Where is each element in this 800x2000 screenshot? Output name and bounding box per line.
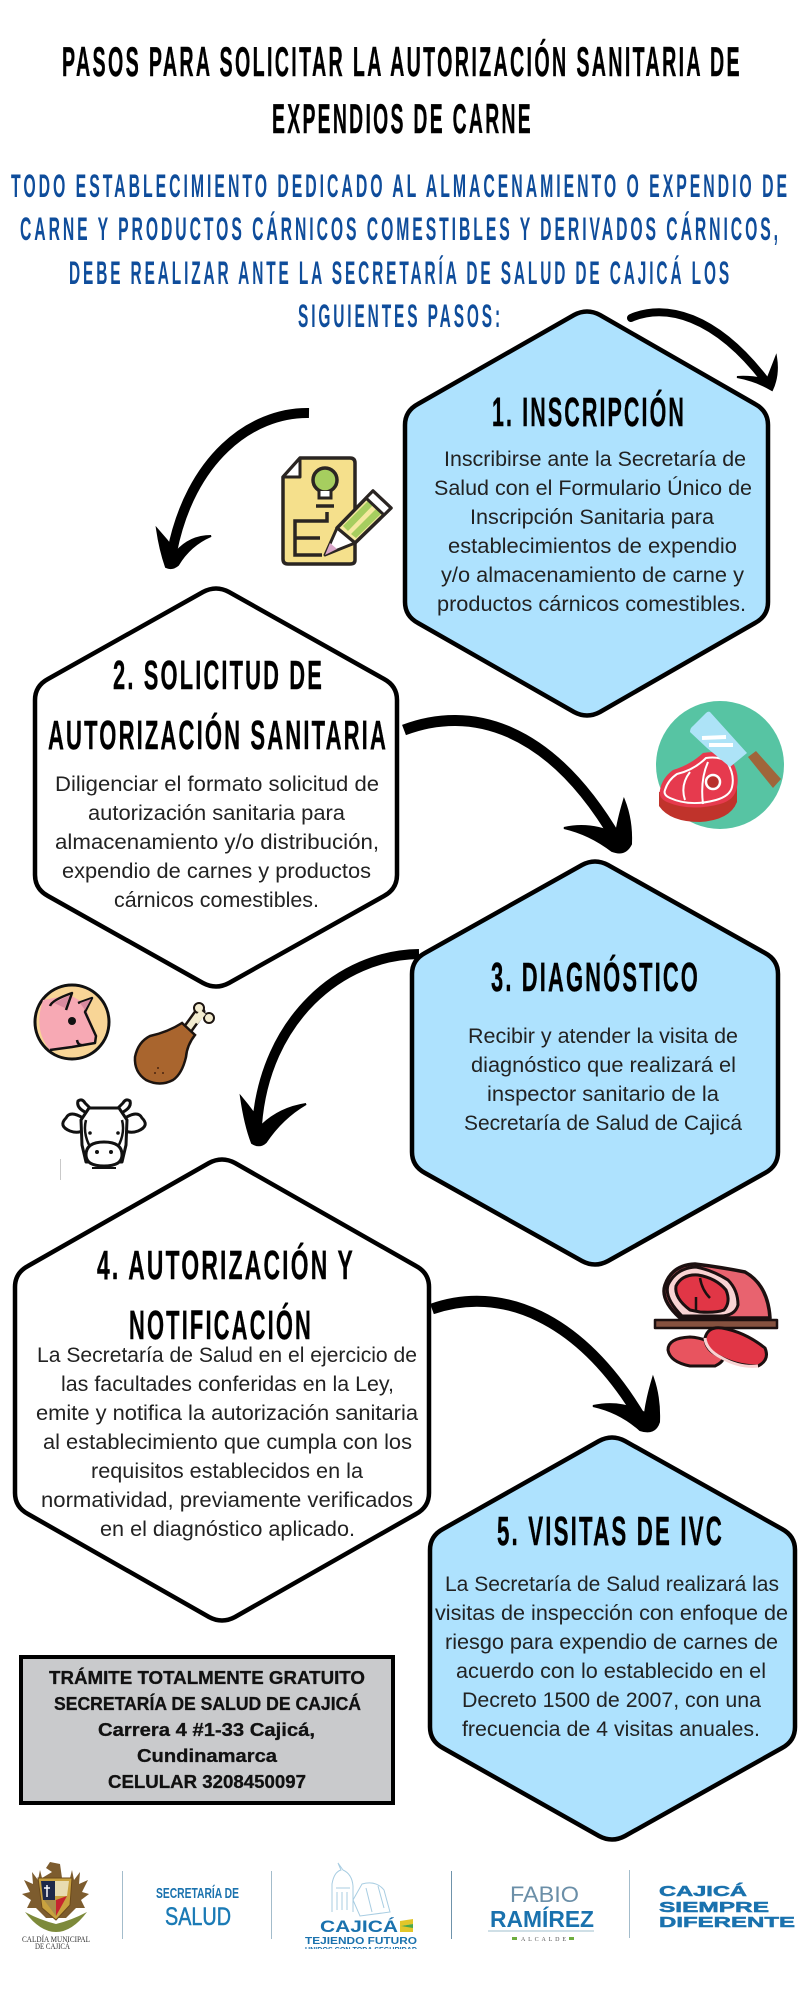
logo: Fabio Ramírez alcalde: FABIO <box>510 1882 579 1907</box>
logo: secretaría de salud <box>156 1885 239 1931</box>
title <box>62 37 742 142</box>
icon: pig <box>35 985 109 1059</box>
logo: Cajicá siempre diferente <box>659 1883 795 1931</box>
logo: secretaría de salud: SALUD <box>165 1903 231 1931</box>
panel: step 2 solicitud: AUTORIZACIÓN SANITARIA <box>48 712 388 758</box>
logo: Cajicá tejiendo futuro: TEJIENDO FUTURO <box>305 1935 417 1947</box>
panel: step 1 inscripción: y/o almacenamiento de carne y <box>441 564 745 587</box>
icon: cleaver and steak <box>656 701 784 829</box>
intro text <box>11 168 790 334</box>
logo: Cajicá tejiendo futuro: UNIDOS CON TODA SEGURIDAD <box>305 1947 417 1954</box>
panel: step 5 visitas de IVC <box>430 1438 795 1840</box>
intro text: SIGUIENTES PASOS: <box>298 298 503 334</box>
panel: step 5 visitas de IVC: riesgo para expendio de carnes de <box>445 1631 778 1654</box>
arrow: step 1 to step 2 <box>157 413 309 568</box>
icon: chicken drumstick <box>135 1003 214 1084</box>
panel: step 4 autorización y notificación: normatividad, previamente verificados <box>41 1489 413 1512</box>
panel: step 4 autorización y notificación: al establecimiento que cumpla con los <box>43 1431 412 1454</box>
panel: step 2 solicitud: Diligenciar el formato solicitud de <box>55 773 379 796</box>
panel: step 5 visitas de IVC: La Secretaría de Salud realizará las <box>445 1573 779 1596</box>
panel: step 2 solicitud: autorización sanitaria para <box>88 802 345 825</box>
panel: step 2 solicitud: almacenamiento y/o distribución, <box>55 831 379 854</box>
icon: cow <box>63 1100 145 1168</box>
logo: Cajicá tejiendo futuro <box>305 1863 417 1954</box>
panel: step 4 autorización y notificación <box>15 1160 429 1620</box>
panel: step 2 solicitud <box>35 588 397 986</box>
arrow: into step 1 <box>631 312 777 390</box>
panel: step 1 inscripción: establecimientos de expendio <box>448 535 737 558</box>
icon: document with pencil <box>283 458 391 564</box>
panel: step 1 inscripción: Inscripción Sanitaria para <box>470 506 714 529</box>
panel: step 2 solicitud: cárnicos comestibles. <box>114 889 319 912</box>
logo: Fabio Ramírez alcalde <box>488 1882 594 1943</box>
panel: step 3 diagnóstico <box>412 862 778 1264</box>
callout: free procedure contact box: Carrera 4 #1-33 Cajicá, <box>98 1719 315 1740</box>
callout: free procedure contact box: Cundinamarca <box>137 1745 278 1766</box>
callout: free procedure contact box: SECRETARÍA DE SALUD DE CAJICÁ <box>54 1693 361 1714</box>
logo: secretaría de salud: SECRETARÍA DE <box>156 1885 239 1902</box>
panel: step 5 visitas de IVC: Decreto 1500 de 2007, con una <box>462 1689 761 1712</box>
panel: step 5 visitas de IVC: visitas de inspección con enfoque de <box>435 1602 788 1625</box>
panel: step 5 visitas de IVC: frecuencia de 4 visitas anuales. <box>462 1718 760 1741</box>
panel: step 4 autorización y notificación: La Secretaría de Salud en el ejercicio de <box>37 1344 417 1367</box>
panel: step 1 inscripción <box>405 312 768 716</box>
arrow: step 3 to step 4 <box>241 954 419 1145</box>
panel: step 5 visitas de IVC: acuerdo con lo establecido en el <box>456 1660 766 1683</box>
callout: free procedure contact box: CELULAR 3208450097 <box>108 1771 306 1792</box>
panel: step 4 autorización y notificación: requisitos establecidos en la <box>91 1460 363 1483</box>
callout: free procedure contact box <box>21 1657 393 1803</box>
panel: step 3 diagnóstico: diagnóstico que realizará el <box>471 1054 736 1077</box>
panel: step 4 autorización y notificación: emite y notifica la autorización sanitaria <box>36 1402 418 1425</box>
panel: step 1 inscripción: Inscribirse ante la Secretaría de <box>444 448 746 471</box>
logo: alcaldía municipal de Cajicá: DE CAJICÁ <box>35 1941 71 1951</box>
logo: Fabio Ramírez alcalde: ALCALDE <box>521 1937 566 1943</box>
logo: Cajicá tejiendo futuro: CAJICÁ <box>320 1917 398 1936</box>
panel: step 4 autorización y notificación: las facultades conferidas en la Ley, <box>61 1373 394 1396</box>
panel: step 2 solicitud: expendio de carnes y productos <box>62 860 371 883</box>
logo: Cajicá siempre diferente: SIEMPRE <box>659 1899 769 1916</box>
panel: step 4 autorización y notificación: 4. AUTORIZACIÓN Y <box>97 1242 355 1288</box>
panel: step 1 inscripción: productos cárnicos comestibles. <box>437 593 746 616</box>
icon: roast and slices <box>655 1264 777 1366</box>
logo: Fabio Ramírez alcalde: RAMÍREZ <box>490 1905 594 1932</box>
panel: step 3 diagnóstico: Recibir y atender la visita de <box>468 1025 738 1048</box>
panel: step 4 autorización y notificación: en el diagnóstico aplicado. <box>100 1518 355 1541</box>
arrow: step 2 to step 3 <box>404 720 631 852</box>
panel: step 3 diagnóstico: Secretaría de Salud de Cajicá <box>464 1112 742 1135</box>
callout: free procedure contact box: TRÁMITE TOTALMENTE GRATUITO <box>49 1667 365 1688</box>
panel: step 4 autorización y notificación: NOTIFICACIÓN <box>129 1302 313 1348</box>
panel: step 3 diagnóstico: inspector sanitario de la <box>487 1083 719 1106</box>
logo: Cajicá siempre diferente: DIFERENTE <box>659 1914 795 1931</box>
logo: alcaldía municipal de Cajicá: CALDÍA MUNICIPAL <box>22 1934 90 1944</box>
logo: Cajicá siempre diferente: CAJICÁ <box>659 1883 747 1900</box>
panel: step 2 solicitud: 2. SOLICITUD DE <box>113 652 324 698</box>
logo: alcaldía municipal de Cajicá <box>22 1862 90 1951</box>
arrow: step 4 to step 5 <box>432 1301 659 1431</box>
panel: step 1 inscripción: Salud con el Formulario Único de <box>434 477 752 500</box>
